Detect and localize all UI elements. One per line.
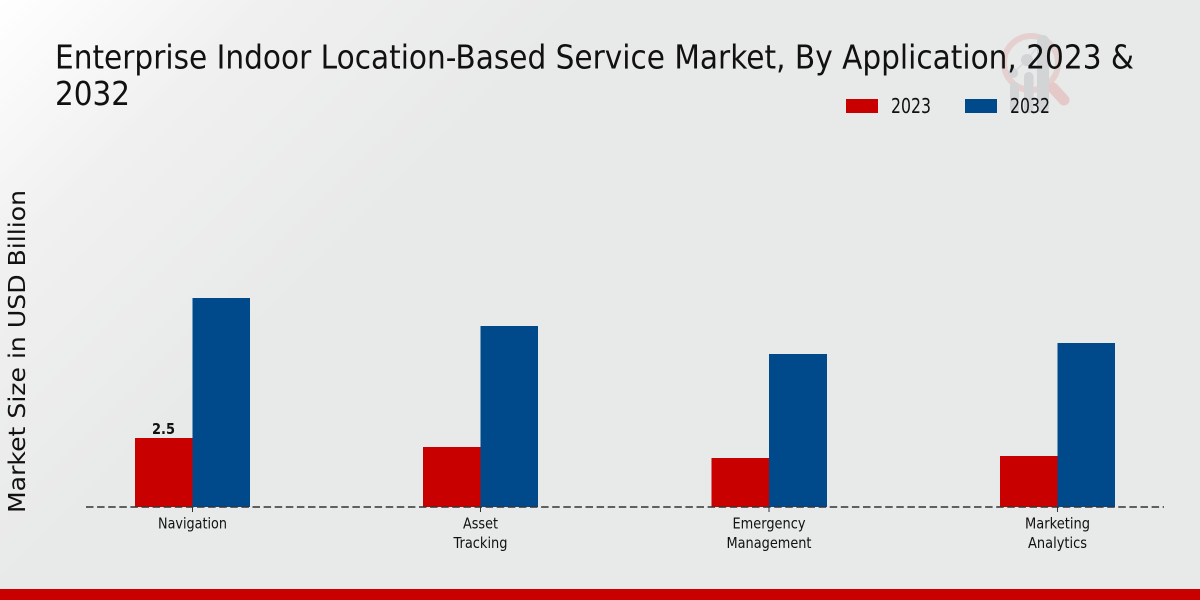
y-axis title: Market Size in USD Billion [3,190,31,513]
title [55,38,1134,113]
bars: Emergency Management [712,354,827,507]
icon: watermark logo [1004,35,1064,113]
label: Emergency Management [726,514,812,552]
label: Asset Tracking: Tracking [453,534,508,552]
legend item: 2032: 2032 [1010,94,1050,118]
footer bar [0,589,1200,600]
bars: Marketing Analytics [1000,343,1115,507]
x-axis labels [158,514,1090,552]
bars: Navigation [135,298,250,507]
label: Asset Tracking: Asset [463,514,498,532]
label: Marketing Analytics [1025,514,1090,552]
bar chart [86,298,1164,512]
label: Asset Tracking [453,514,508,552]
label: Marketing Analytics: Marketing [1025,514,1090,532]
label: Navigation: Navigation [158,514,227,532]
title: 2032 [55,74,130,113]
label: Marketing Analytics: Analytics [1028,534,1087,552]
bars: Asset Tracking [423,326,538,507]
label: Emergency Management: Emergency [732,514,806,532]
legend [846,94,1050,118]
legend item: 2023: 2023 [891,94,931,118]
legend item: 2023 [846,94,931,118]
label: Emergency Management: Management [726,534,812,552]
legend item: 2032 [965,94,1050,118]
data label: 2.5: 2.5 [152,420,175,438]
